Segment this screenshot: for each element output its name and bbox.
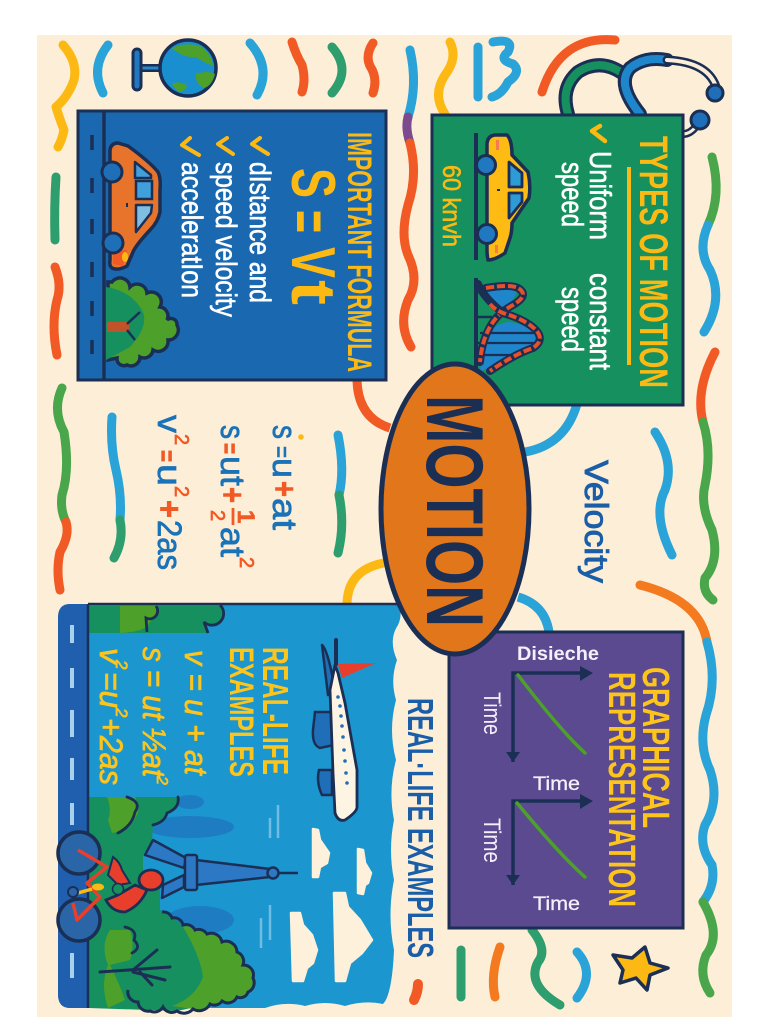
equation: s = ut + half at squared: at [213, 527, 251, 558]
formula: s = vt: t [278, 280, 347, 305]
equation: v squared: 2as [150, 520, 188, 570]
clouds [291, 829, 372, 981]
formulas in panel: 2 [112, 659, 131, 670]
panel: real-life examples [58, 604, 402, 1013]
formulas in panel: v = u + at [178, 650, 214, 776]
equation: s = ut + half at squared: = [215, 443, 245, 454]
equation: s = u + at: s [265, 425, 303, 439]
formulas in panel: =u [93, 672, 129, 708]
equation: s = u + at: u [265, 458, 303, 478]
equation list [150, 415, 304, 570]
panel: types of motion [432, 115, 683, 405]
icon: aeroplane [261, 640, 376, 948]
equation: s = ut + half at squared: 2 [206, 510, 228, 521]
equation: v squared: = [152, 450, 182, 462]
formula: s = vt: S [278, 168, 347, 198]
formulas in panel: 2 [112, 707, 131, 718]
formula: s = vt: V [278, 247, 347, 278]
equation: s = ut + half at squared: ut [213, 456, 251, 487]
list: motion types: constant [583, 273, 618, 370]
equation: s = u + at: + [265, 481, 303, 497]
checklist: speed velocity [209, 162, 242, 317]
heading: graphical representation: GRAPHICAL [634, 667, 676, 828]
heading: real-life examples: REAL-LIFE [255, 647, 296, 775]
equation: v squared: u [150, 464, 188, 486]
chart: graph two [478, 794, 593, 915]
green ground top [89, 605, 224, 633]
icon: eiffel tower [145, 840, 298, 898]
equation: s = u + at [265, 425, 304, 531]
icon: roller coaster [476, 278, 540, 375]
equation: v squared: 2 [170, 486, 192, 497]
icon: tree [106, 278, 178, 366]
list: motion types: speed [555, 162, 590, 227]
list: motion types: speed [555, 287, 590, 352]
central oval: motion: MOTION [409, 395, 499, 627]
connector arcs to centre [347, 380, 577, 632]
formulas in panel: v [93, 648, 129, 666]
central oval: motion [381, 364, 529, 654]
chart: graph one [478, 644, 599, 795]
chart: graph two: Time [478, 818, 505, 863]
equation: s = ut + half at squared: + [213, 487, 251, 503]
checklist: dIstance and [243, 162, 276, 303]
icon: yellow car [476, 133, 530, 260]
panel: important formula [78, 111, 386, 380]
side label: velocity: Velocity [578, 460, 615, 584]
equation: v squared [150, 415, 192, 570]
equation: s = ut + half at squared: 1 [232, 510, 259, 523]
chart: graph one: Time [533, 774, 580, 795]
checklist [175, 138, 276, 317]
green ground bottom with trees [89, 797, 254, 1013]
chart: graph two: Time [533, 894, 580, 915]
heading: types of motion: TYPES OF MOTION [631, 136, 675, 388]
equation: v squared: + [150, 500, 188, 518]
icon: globe [137, 40, 216, 96]
list: motion types [555, 126, 618, 370]
equation: s = ut + half at squared: s [213, 425, 251, 439]
formula: s = vt: = [274, 210, 343, 233]
heading: important formula: IMPORTANT FORMULA [340, 132, 378, 372]
formulas in panel: 2 [153, 775, 170, 785]
formulas in panel: s = ut ½at [136, 647, 172, 778]
icon: star [613, 947, 668, 990]
formulas in panel [93, 647, 214, 785]
faded skyline [146, 795, 234, 934]
chart: graph one: Disieche [517, 644, 599, 665]
road [58, 604, 88, 1008]
icon: stethoscope [566, 59, 723, 134]
equation: s = u + at: = [267, 446, 297, 458]
panel: real-life examples: EXAMPLES [222, 647, 260, 777]
equation: v squared: 2 [170, 434, 192, 445]
chart: graph one: Time [478, 692, 505, 735]
equation: v squared: v [150, 415, 188, 433]
icon: orange car [102, 143, 160, 269]
panel: graphical representation [449, 632, 683, 928]
panel: graphical representation: REPRESENTATION [600, 672, 642, 907]
equation: s = ut + half at squared [206, 425, 259, 568]
icon: cyclist [58, 832, 163, 941]
equation: s = u + at: at [265, 498, 303, 531]
checklist: acceleratIon [175, 162, 208, 298]
list: motion types: Uniform [583, 151, 618, 240]
label: speed: 60 knvh [437, 165, 465, 247]
formula: s = vt [274, 168, 347, 305]
equation: s = ut + half at squared: 2 [235, 557, 257, 568]
formulas in panel: +2as [93, 718, 129, 785]
